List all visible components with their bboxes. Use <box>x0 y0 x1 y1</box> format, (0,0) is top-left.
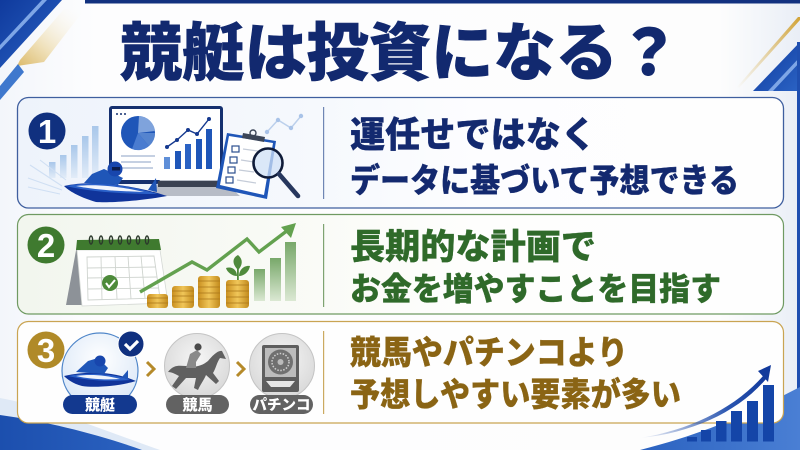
decoration: right edge stripe <box>797 42 800 392</box>
icon: pachinko machine circle <box>250 334 314 398</box>
bar chart: green growth <box>254 242 296 301</box>
icon: check badge <box>118 331 144 357</box>
panel: 3 compared with others <box>18 322 784 423</box>
number badge 3: 3 <box>37 332 55 369</box>
label pill: horse racing <box>166 395 229 414</box>
icon: sprout <box>226 255 250 280</box>
text block 2: 長期的な計画で <box>350 228 596 267</box>
text block 2 <box>350 228 721 307</box>
title: 競艇は投資になる？ <box>120 19 680 89</box>
divider 1 <box>323 107 324 199</box>
number badge 2 <box>28 226 64 264</box>
icon: rising green arrow <box>140 223 296 292</box>
faint line chart backdrop <box>265 114 303 134</box>
decoration: top right corner <box>737 17 800 91</box>
panel 2 frame <box>18 214 784 314</box>
faint bar chart backdrop <box>49 126 98 178</box>
text block 1 <box>350 114 739 199</box>
arrow: bottom right growth curve <box>640 365 771 438</box>
number badge 3 <box>28 332 64 369</box>
arrow chevron 1 <box>147 362 154 376</box>
label pill: boat racing: 競艇 <box>85 396 115 414</box>
number badge 2: 2 <box>37 227 55 264</box>
divider 3 <box>323 331 324 414</box>
icon: boat circle with check <box>62 333 138 409</box>
text block 1: 運任せではなく <box>350 114 596 155</box>
text block 2: お金を増やすことを目指す <box>350 271 721 307</box>
arrow chevron 2 <box>237 362 244 376</box>
label pill: pachinko: パチンコ <box>252 396 310 414</box>
icon: horse racing circle <box>164 334 230 398</box>
icon: clipboard checklist <box>216 130 276 199</box>
decoration: bottom left swoop <box>0 398 160 450</box>
decoration: bottom right swoop <box>640 387 800 450</box>
label pill: horse racing: 競馬 <box>182 396 213 414</box>
decoration: top left corner <box>0 0 84 100</box>
number badge 1 <box>28 112 66 150</box>
icon: coin stacks <box>147 276 249 308</box>
icon: desk calendar <box>66 236 168 306</box>
icon: racing boat with spray <box>28 160 167 202</box>
text block 3 <box>350 334 681 413</box>
text block 3: 予想しやすい要素が多い <box>350 376 681 413</box>
panel: 2 long-term plan <box>18 214 784 314</box>
text block 3: 競馬やパチンコより <box>350 334 628 371</box>
icon: magnifying glass <box>254 148 298 196</box>
decoration: top bar <box>85 0 800 4</box>
icon: laptop with charts <box>109 106 240 196</box>
panel 3 frame <box>18 322 784 423</box>
number badge 1: 1 <box>38 113 56 150</box>
panel: 1 data-based prediction <box>18 98 784 208</box>
divider 2 <box>323 224 324 307</box>
panel 1 frame <box>18 98 784 208</box>
bar chart: bottom right growth <box>687 385 774 442</box>
label pill: boat racing <box>63 395 137 414</box>
text block 1: データに基づいて予想できる <box>350 162 739 199</box>
